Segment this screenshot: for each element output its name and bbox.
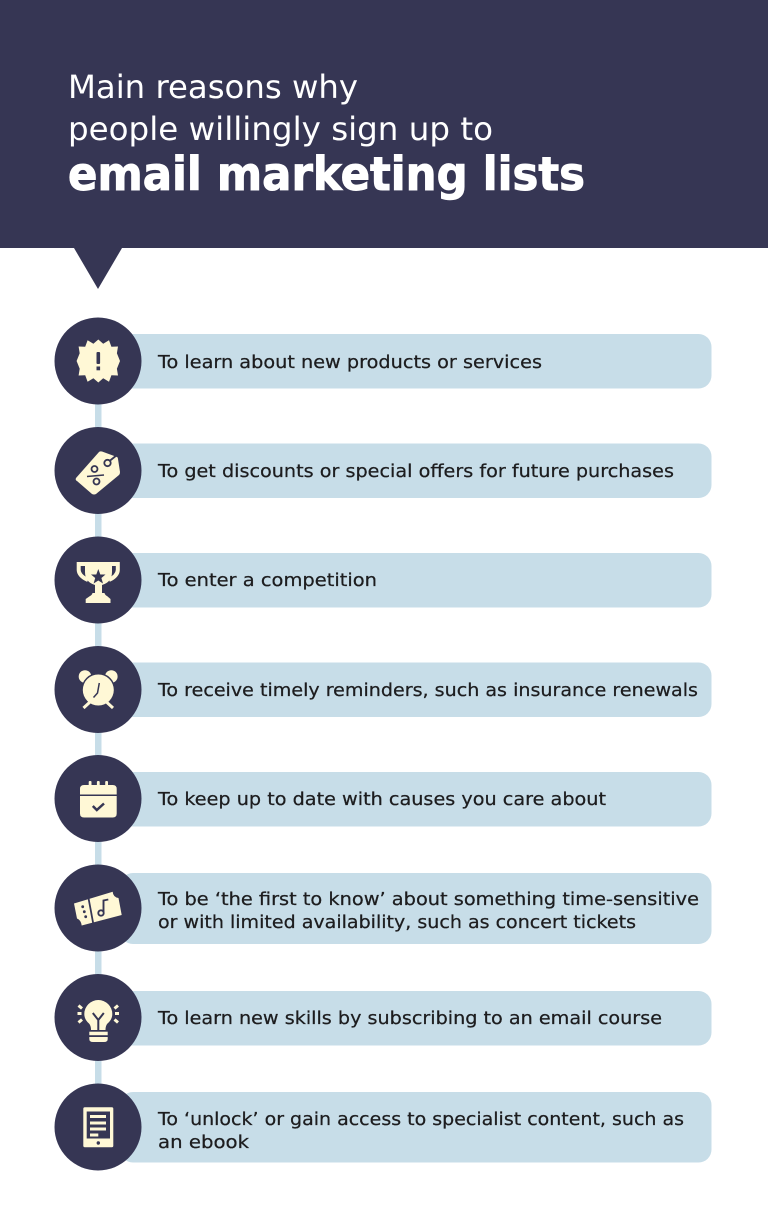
icon: exclamation badge (77, 340, 120, 382)
item 6: first to know (54, 864, 712, 952)
item 3: competition (54, 536, 712, 624)
icon: alarm clock (79, 670, 118, 708)
item 7: new skills (54, 974, 712, 1061)
icon: calendar (80, 781, 117, 818)
title (68, 68, 585, 201)
icon: trophy (79, 562, 118, 603)
item 1: new products (54, 318, 712, 404)
text: To be ‘the first to know’ about something time-sensitive (157, 889, 699, 910)
icon: discount tag (76, 451, 120, 494)
header banner (0, 0, 768, 289)
item 6: first to know: or with limited availability, such as concert tickets (158, 912, 636, 933)
item 2: discounts (54, 427, 712, 514)
text: To keep up to date with causes you care about (157, 789, 606, 810)
text: To enter a competition (157, 570, 377, 591)
text: To get discounts or special offers for future purchases (157, 461, 674, 482)
timeline connector (95, 361, 102, 1127)
item 4: reminders (54, 646, 712, 733)
text: To learn about new products or services (157, 352, 542, 373)
text: To ‘unlock’ or gain access to specialist content, such as (157, 1109, 684, 1130)
title: people willingly sign up to (68, 110, 493, 148)
item 8: specialist content (54, 1084, 712, 1170)
text: To learn new skills by subscribing to an email course (157, 1008, 662, 1029)
icon: ebook tablet (83, 1107, 113, 1147)
item 8: specialist content: an ebook (158, 1132, 250, 1153)
item 5: causes (54, 755, 712, 842)
title: email marketing lists (68, 147, 585, 201)
text: To receive timely reminders, such as insurance renewals (157, 680, 698, 701)
icon: light bulb (78, 1000, 119, 1042)
title: Main reasons why (68, 68, 358, 106)
icon: ticket (74, 892, 122, 926)
